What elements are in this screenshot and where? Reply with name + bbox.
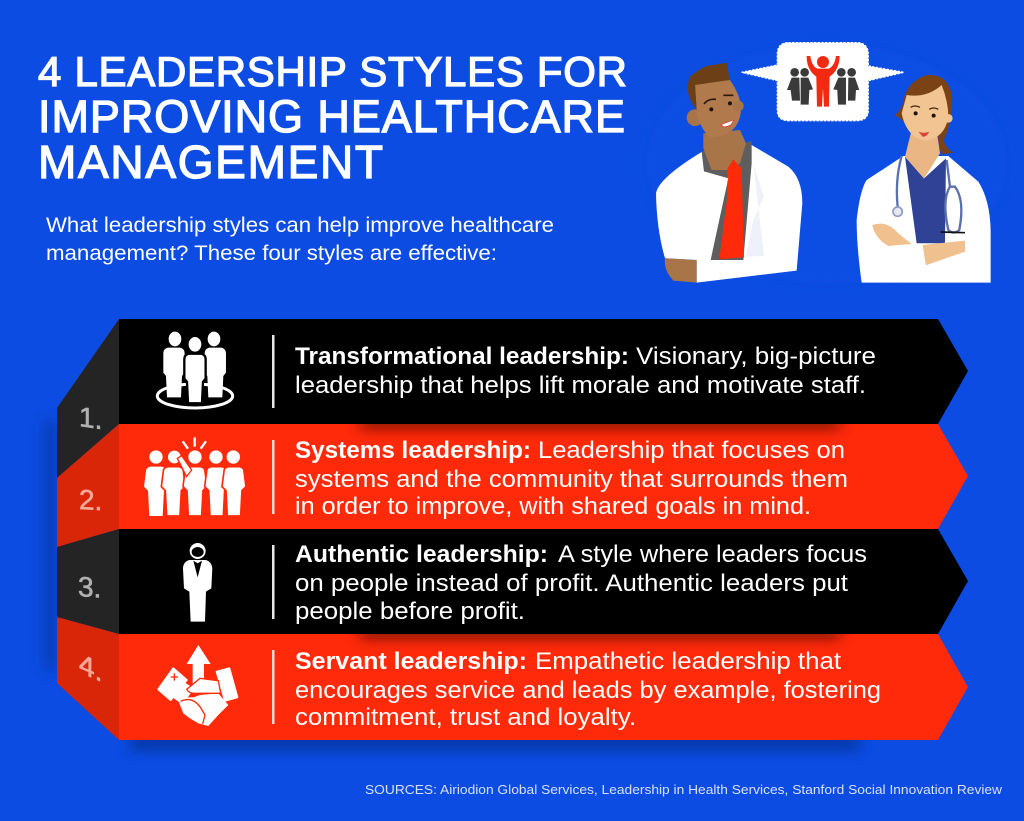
text: authentic: on people instead of profit. Authentic leaders put [295,570,848,597]
number 4: 4. [79,647,102,689]
text: authentic: people before profit. [295,598,525,625]
text: systems: in order to improve, with shared goals in mind. [295,493,811,520]
title: MANAGEMENT [38,136,383,188]
title: IMPROVING HEALTHCARE [38,91,625,142]
icon: group of leaders [157,332,233,408]
shadows under the bars [44,420,860,750]
text: systems: Systems leadership: [295,437,531,464]
text: authentic: A style where leaders focus [558,541,867,568]
icon: single leader [183,543,212,622]
text: transformational: leadership that helps lift morale and motivate staff. [295,372,866,399]
number 2: 2. [79,484,102,516]
sources: SOURCES: Airiodion Global Services, Leadership in Health Services, Stanford Social Innovation Review [365,782,1003,797]
man doctor [656,63,802,283]
text: authentic: Authentic leadership: [295,541,548,568]
number 3: 3. [78,571,101,604]
title [38,48,627,188]
text: servant [295,648,881,731]
number 1: 1. [79,401,102,435]
text: systems: systems and the community that surrounds them [295,466,848,493]
text: servant: encourages service and leads by example, fostering [295,677,881,704]
text: servant: commitment, trust and loyalty. [295,704,636,731]
text: systems: Leadership that focuses on [538,437,845,464]
text: transformational: Transformational leadership: [295,343,629,370]
intro text: management? These four styles are effective: [46,242,497,265]
text: transformational: Visionary, big-picture [636,343,876,370]
icon: handshake with arrow [158,645,237,726]
text: systems [295,437,848,520]
illustration: two doctors with speech bubble [647,43,1007,283]
panel: 3 authentic leadership [57,529,968,634]
text: authentic [295,541,867,625]
text: servant: Empathetic leadership that [535,648,841,675]
intro text [46,214,554,265]
text: transformational [295,343,876,399]
icon: team with raised hand [144,437,246,516]
intro text: What leadership styles can help improve healthcare [46,214,554,237]
text: servant: Servant leadership: [295,648,527,675]
panel: 4 servant leadership [57,617,968,740]
panel: 1 transformational leadership [57,319,968,478]
title: 4 LEADERSHIP STYLES FOR [38,48,627,95]
panel: 2 systems leadership [57,414,968,547]
woman doctor [857,75,991,283]
speech bubble [742,43,904,121]
